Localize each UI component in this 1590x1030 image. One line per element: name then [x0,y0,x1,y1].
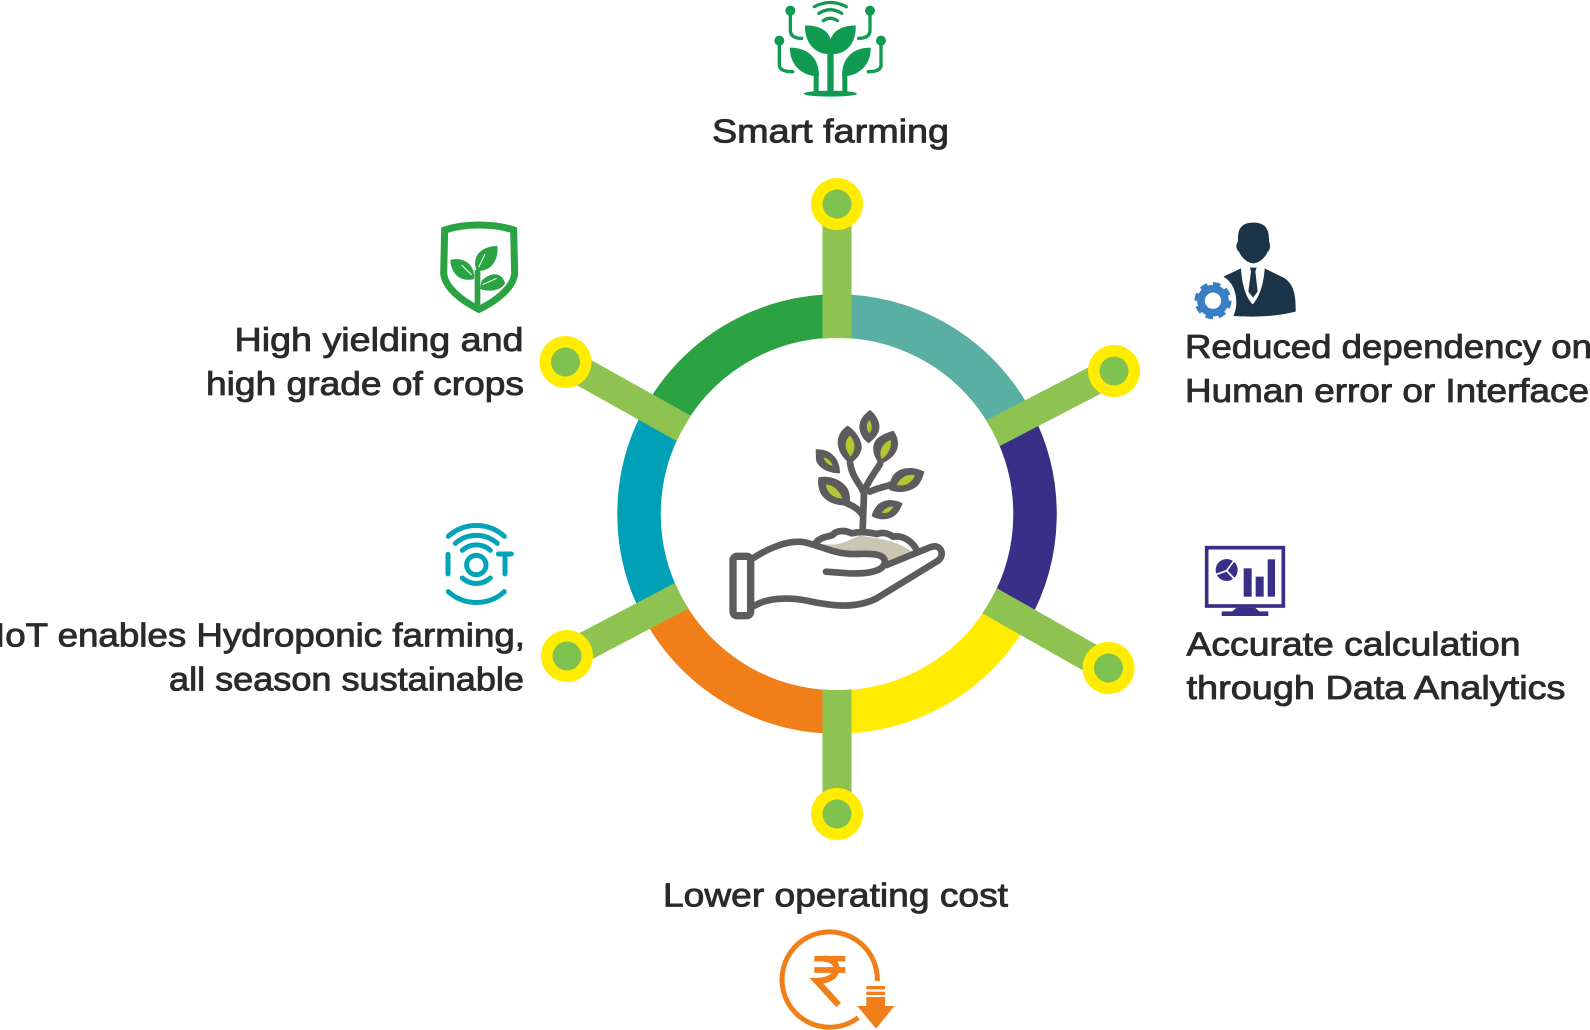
node: upper right [1088,345,1140,397]
node: bottom [811,788,863,840]
label: smart farming: Smart farming [712,112,949,150]
ring with six coloured segments [639,316,1035,712]
label: IoT hydroponic farming [0,616,525,698]
label: accurate calculation [1186,626,1566,706]
label: reduced dependency: Reduced dependency on [1185,328,1590,365]
icon: shield with plant [444,225,515,309]
label: IoT hydroponic farming: all season sustainable [169,660,524,698]
icon: IoT signal [448,526,511,602]
six spokes [565,204,1113,813]
node: lower right [1082,642,1134,694]
label: reduced dependency [1185,328,1590,409]
label: high yielding [206,321,524,402]
icon: smart farming plant with wifi and circuit [774,2,886,97]
icon: businessman with gear [1197,223,1296,317]
label: lower operating cost: Lower operating cost [663,876,1008,914]
node: upper left [540,336,592,388]
label: IoT hydroponic farming: IoT enables Hydroponic farming, [0,616,525,654]
label: accurate calculation: Accurate calculation [1186,626,1520,662]
label: accurate calculation: through Data Analytics [1186,669,1566,706]
white centre disc [661,338,1013,690]
node: top [811,178,863,230]
label: high yielding: high grade of crops [206,365,524,402]
node: lower left [541,630,593,682]
icon: monitor with analytics [1207,548,1283,616]
icon: rupee with down arrow [782,932,894,1029]
label: high yielding: High yielding and [234,321,524,358]
label: reduced dependency: Human error or Interface [1185,372,1589,409]
icon: hand holding a sapling [733,410,942,616]
